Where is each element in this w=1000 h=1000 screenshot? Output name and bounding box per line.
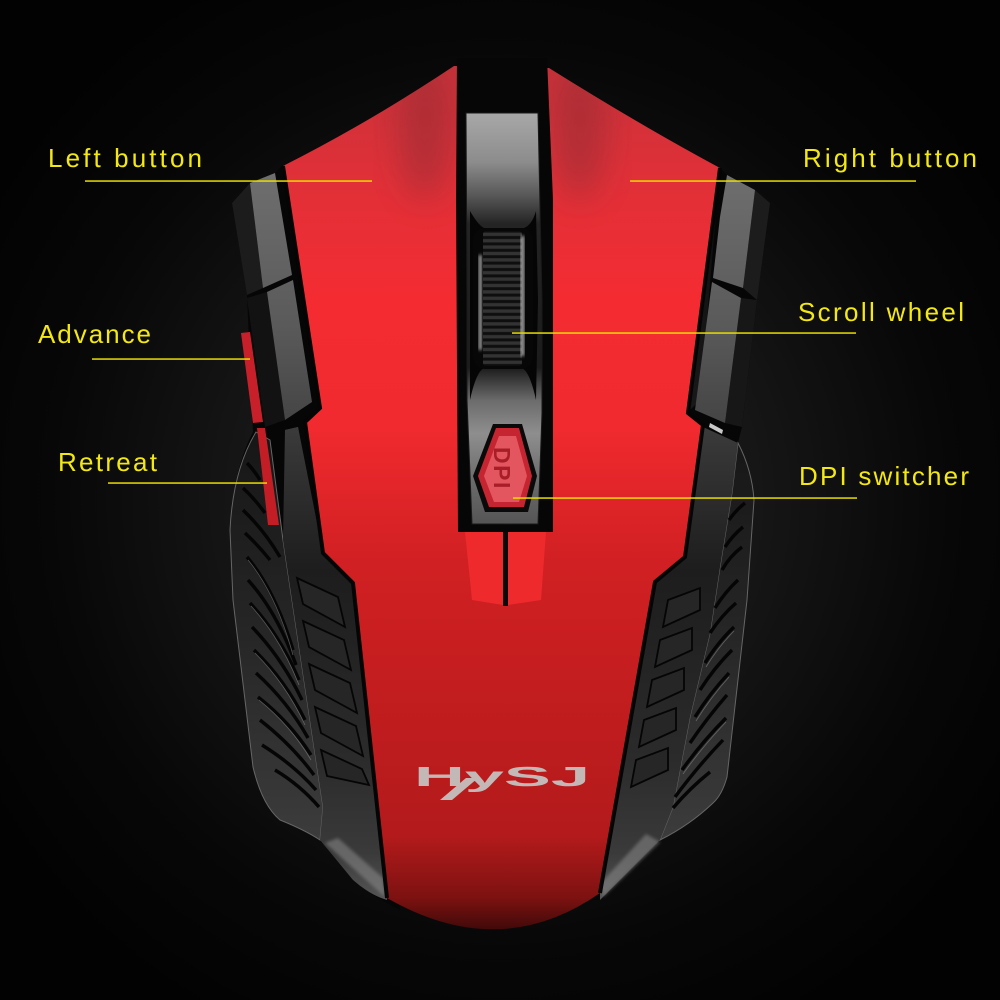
left side shell	[230, 165, 400, 910]
left grip panel	[230, 427, 387, 900]
callout: advance: Advance	[38, 319, 151, 349]
callout: retreat: Retreat	[58, 447, 158, 477]
top ridge plate	[466, 113, 542, 524]
callout: scroll wheel: Scroll wheel	[798, 297, 964, 327]
right side shell	[560, 168, 770, 900]
DPI button	[473, 424, 537, 512]
scroll wheel	[470, 211, 538, 400]
retreat side button	[257, 428, 279, 525]
callout: DPI switcher: DPI switcher	[799, 461, 969, 491]
DPI button: DPI	[489, 447, 515, 490]
brand logo	[414, 761, 590, 800]
callout: left button: Left button	[48, 143, 202, 173]
red top shell	[283, 60, 720, 929]
left grip indents	[297, 578, 369, 785]
advance side button	[241, 332, 263, 423]
mouse	[230, 58, 770, 929]
right grip indents	[631, 588, 700, 787]
lower center tabs	[465, 532, 546, 606]
center channel	[456, 58, 553, 532]
brand logo: HySJ	[414, 761, 590, 792]
right grip panel	[600, 427, 754, 900]
callout: right button: Right button	[803, 143, 977, 173]
